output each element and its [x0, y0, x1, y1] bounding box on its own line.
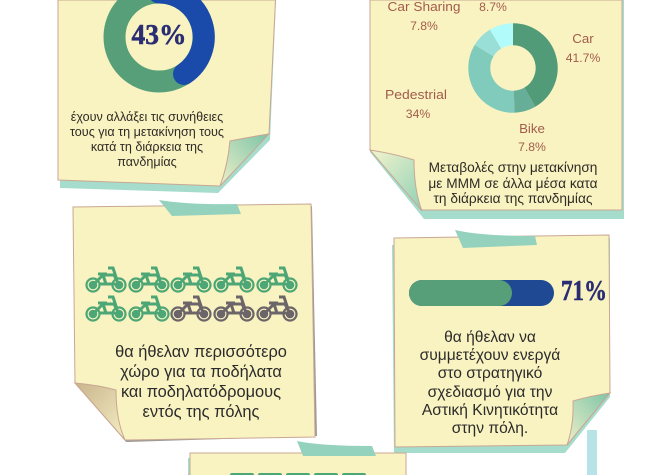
chart labels: 8.7% [479, 0, 507, 14]
description text: πανδημίας [117, 155, 177, 169]
chart labels: 34% [406, 107, 430, 121]
decorative connector line [587, 430, 597, 475]
description text: σχεδιασμό για την [428, 384, 553, 401]
panel: modal shift [370, 0, 624, 219]
page fold [567, 393, 610, 445]
tape [455, 230, 537, 248]
panel: 43% changed habits [58, 0, 276, 193]
progress bar: 71% [409, 280, 554, 306]
donut chart: modes [479, 34, 547, 102]
description text: στην πόλη. [452, 420, 528, 437]
description text: και ποδηλατόδρομους [121, 383, 281, 401]
description text: Αστική Κινητικότητα [422, 402, 558, 419]
description text [115, 343, 287, 421]
description text: συμμετέχουν ενεργά [420, 347, 560, 364]
panel: bottom note [188, 441, 406, 475]
page fold [370, 150, 422, 211]
chart labels: 7.8% [518, 140, 546, 154]
chart labels: Car [572, 31, 594, 46]
description text [70, 110, 224, 169]
description text: με ΜΜΜ σε άλλα μέσα κατα [428, 176, 598, 191]
chart labels: 41.7% [566, 51, 600, 65]
tape [297, 441, 376, 456]
description text: θα ήθελαν να [444, 329, 536, 346]
page fold [75, 383, 125, 440]
panel: bicycle space [73, 200, 317, 442]
description text [428, 160, 598, 206]
bicycle icon array: 7 of 10 green [86, 268, 296, 320]
description text: χώρο για τα ποδήλατα [120, 363, 282, 381]
description text: έχουν αλλάξει τις συνήθειες [71, 110, 223, 124]
description text [420, 329, 560, 437]
description text: εντός της πόλης [143, 403, 260, 421]
description text: θα ήθελαν περισσότερο [115, 343, 287, 361]
description text: κατά τη διάρκεια της [91, 140, 203, 154]
description text: τους για τη μετακίνηση τους [70, 125, 224, 139]
panel: participation [392, 230, 610, 453]
value: 43%: 43% [132, 20, 186, 51]
donut chart: 43% [114, 0, 204, 82]
green icon tops [230, 473, 366, 475]
chart labels [385, 0, 600, 154]
value: 71%: 71% [561, 276, 607, 307]
description text: στο στρατηγικό [438, 365, 543, 382]
chart labels: Bike [519, 121, 545, 136]
page fold [220, 134, 269, 186]
description text: Μεταβολές στην μετακίνηση [429, 160, 597, 175]
tape [159, 200, 241, 216]
chart labels: Pedestrial [385, 87, 447, 102]
chart labels: 7.8% [410, 19, 438, 33]
description text: τη διάρκεια της πανδημίας [434, 191, 593, 206]
